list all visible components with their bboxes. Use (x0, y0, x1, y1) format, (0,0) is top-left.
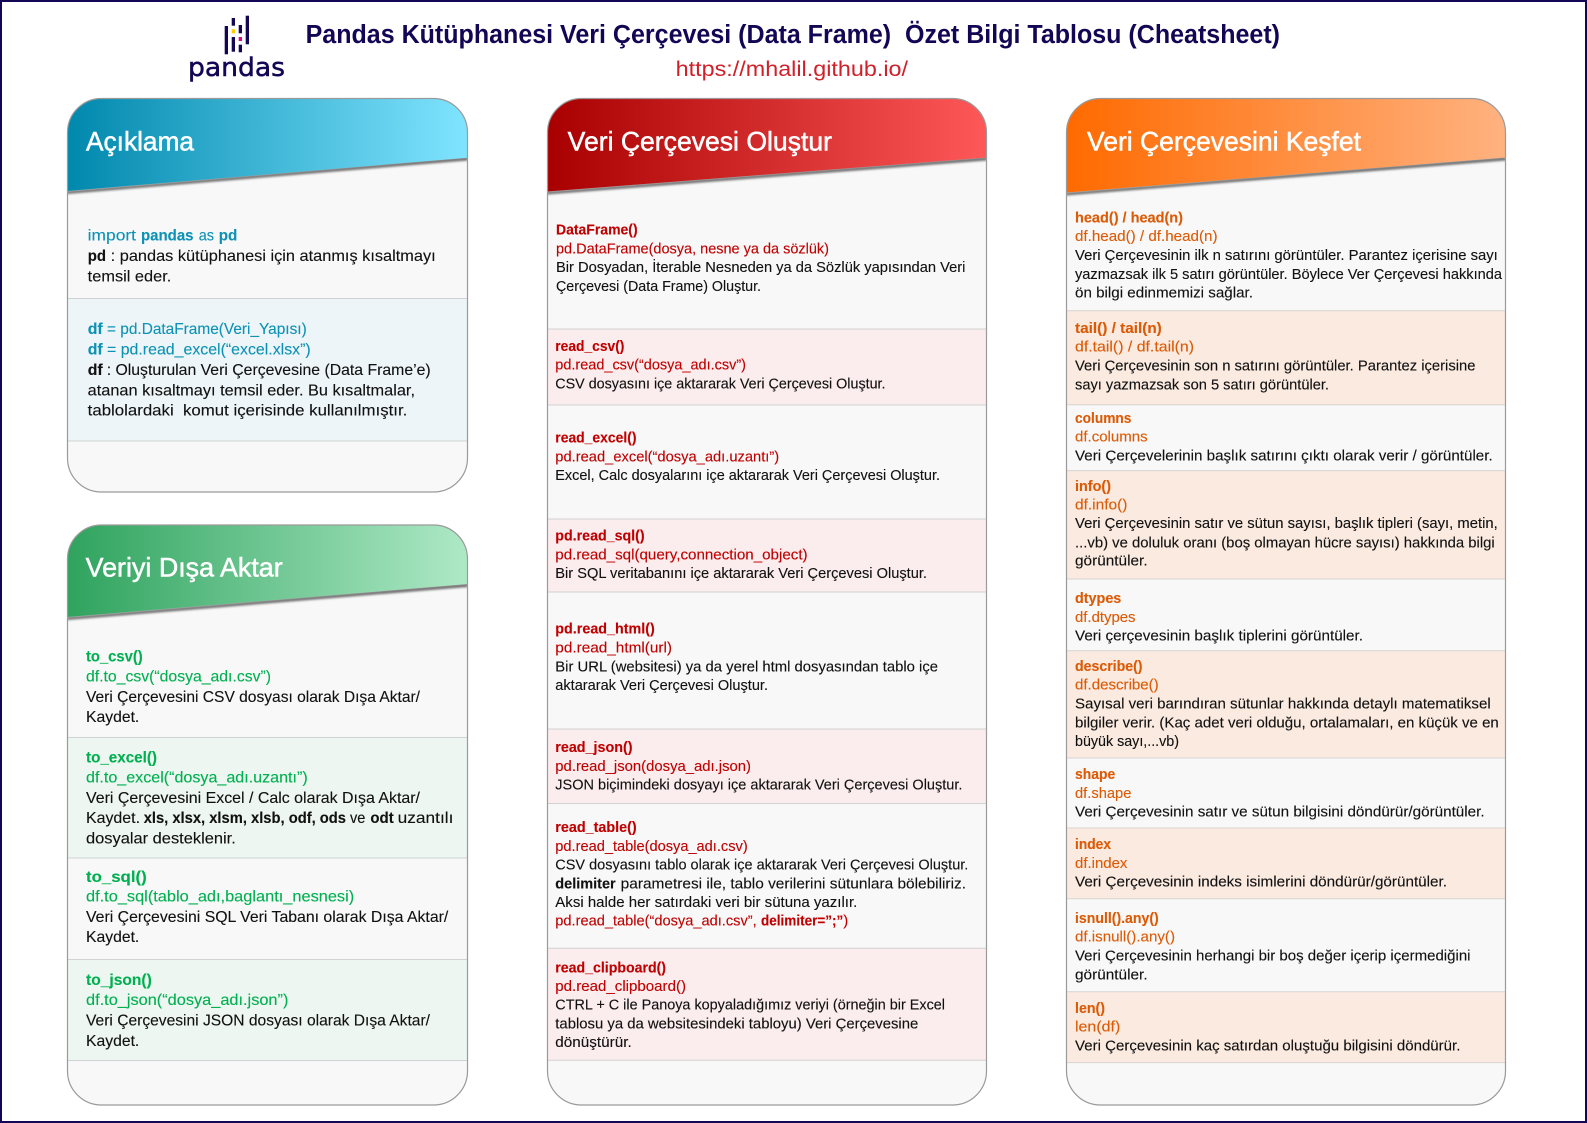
item: info: df.info() (1075, 498, 1127, 514)
item: columns: Veri Çerçevelerinin başlık satırını çıktı olarak verir / görüntüler. (1075, 448, 1493, 464)
item: to_excel: dosyalar desteklenir. (86, 830, 236, 848)
item: to_sql (86, 869, 449, 946)
item: dtypes (1075, 591, 1363, 644)
text block: df: df (88, 341, 103, 358)
item: read_json: JSON biçimindeki dosyayı içe aktararak Veri Çerçevesi Oluştur. (555, 777, 962, 793)
text block: df: df (88, 321, 103, 338)
item: read_clipboard: pd.read_clipboard() (555, 979, 686, 995)
item: columns: df.columns (1075, 430, 1148, 446)
item: head: df.head() / df.head(n) (1075, 229, 1218, 245)
item: to_excel: df.to_excel(“dosya_adı.uzantı”) (86, 770, 308, 787)
item: read_html: aktararak Veri Çerçevesi Oluştur. (555, 678, 768, 694)
item: to_excel: odt (370, 810, 394, 827)
item: read_table: pd.read_table(dosya_adı.csv) (555, 839, 748, 855)
item: to_excel: to_excel() (86, 750, 157, 766)
item: shape: df.shape (1075, 786, 1131, 802)
text block: df: df (88, 362, 103, 379)
item: read_clipboard: tablosu ya da websitesindeki tabloyu) Veri Çerçevesine (555, 1016, 918, 1032)
item: to_excel (86, 750, 453, 848)
text block: import pandas: pandas (141, 228, 194, 244)
item: to_excel: Kaydet. (86, 810, 140, 827)
item: DataFrame: pd.DataFrame(dosya, nesne ya da sözlük) (556, 241, 829, 257)
text block: import pandas: pd (88, 248, 106, 265)
item: len: len() (1075, 1001, 1105, 1017)
item: tail: Veri Çerçevesinin son n satırını görüntüler. Parantez içerisine (1075, 358, 1476, 374)
panel: Veri Çerçevesini Keşfet (1066, 90, 1506, 1105)
item: head: yazmazsak ilk 5 satırı görüntüler. Böylece Ver Çerçevesi hakkında (1075, 267, 1503, 283)
item: index: df.index (1075, 856, 1128, 872)
item: DataFrame: Çerçevesi (Data Frame) Oluştur. (556, 279, 761, 295)
text block: df: tablolardaki komut içerisinde kullanılmıştır. (88, 402, 407, 420)
item: read_csv (555, 339, 886, 392)
item: len: Veri Çerçevesinin kaç satırdan oluştuğu bilgisini döndürür. (1075, 1038, 1460, 1054)
panel: Açıklama (67, 90, 468, 492)
item: len (1075, 1001, 1460, 1054)
text block: import pandas: : pandas kütüphanesi için atanmış kısaltmayı (111, 248, 436, 265)
item: to_csv (86, 648, 421, 726)
item: to_excel: uzantılı (398, 810, 453, 827)
item: describe: büyük sayı,...vb) (1075, 734, 1179, 750)
item: to_json: Kaydet. (86, 1033, 139, 1050)
item: read_csv: pd.read_csv(“dosya_adı.csv”) (555, 358, 746, 374)
item: read_html: Bir URL (websitesi) ya da yerel html dosyasından tablo içe (555, 659, 938, 675)
text block: import pandas: pd (219, 228, 237, 244)
item: to_sql: Veri Çerçevesini SQL Veri Tabanı olarak Dışa Aktar/ (86, 909, 449, 926)
item: info: info() (1075, 479, 1111, 495)
item: to_sql: df.to_sql(tablo_adı,baglantı_nesnesi) (86, 888, 354, 906)
item: head (1075, 211, 1503, 302)
text block: df: = pd.read_excel(“excel.xlsx”) (107, 341, 311, 358)
item: read_html: pd.read_html(url) (555, 641, 672, 657)
item: describe: Sayısal veri barındıran sütunlar hakkında detaylı matematiksel (1075, 696, 1491, 712)
item: isnull: Veri Çerçevesinin herhangi bir boş değer içerip içermediğini (1075, 948, 1470, 964)
text block: df (88, 321, 431, 420)
item: describe: bilgiler verir. (Kaç adet veri olduğu, ortalamaları, en küçük ve en (1075, 716, 1499, 732)
item: read_html: pd.read_html() (555, 622, 655, 638)
item: read_table: read_table() (555, 820, 637, 836)
item: read_sql: pd.read_sql(query,connection_object) (555, 548, 808, 564)
item: read_csv: CSV dosyasını içe aktararak Veri Çerçevesi Oluştur. (555, 376, 886, 392)
item: read_csv: read_csv() (555, 339, 624, 355)
item: len: len(df) (1075, 1020, 1120, 1036)
item: to_sql: Kaydet. (86, 929, 139, 946)
item: read_sql: Bir SQL veritabanını içe aktararak Veri Çerçevesi Oluştur. (555, 566, 927, 582)
item: tail: sayı yazmazsak son 5 satırı görüntüler. (1075, 378, 1329, 394)
item: columns (1075, 411, 1493, 464)
item: dtypes: df.dtypes (1075, 610, 1136, 626)
heading: Veri Çerçevesini Keşfet: Veri Çerçevesini Keşfet (1087, 127, 1362, 157)
title: Pandas Kütüphanesi Veri Çerçevesi (Data Frame) Özet Bilgi Tablosu (Cheatsheet) (306, 20, 1280, 49)
item: info: görüntüler. (1075, 554, 1148, 570)
item: read_table: ) (843, 914, 848, 930)
text block: import pandas: temsil eder. (88, 268, 171, 285)
item: DataFrame (556, 223, 965, 295)
item: read_table: delimiter=”;” (761, 914, 843, 930)
item: read_table: delimiter (555, 876, 616, 892)
item: read_sql (555, 528, 927, 582)
item: isnull: görüntüler. (1075, 968, 1148, 984)
item: read_table: parametresi ile, tablo verilerini sütunlara bölebiliriz. (621, 876, 966, 892)
icon: pandas logo (188, 16, 285, 83)
item: to_excel: xls, xlsx, xlsm, xlsb, odf, ods (144, 810, 346, 827)
item: dtypes: Veri çerçevesinin başlık tiplerini görüntüler. (1075, 628, 1363, 644)
item: read_table: pd.read_table(“dosya_adı.csv”, (555, 914, 757, 930)
heading: Açıklama: Açıklama (86, 127, 194, 157)
item: head: ön bilgi edinmemizi sağlar. (1075, 286, 1253, 302)
item: info (1075, 479, 1498, 570)
item: index: index (1075, 837, 1112, 853)
item: read_clipboard: read_clipboard() (555, 960, 666, 976)
item: read_json (555, 740, 962, 793)
item: read_excel: Excel, Calc dosyalarını içe aktararak Veri Çerçevesi Oluştur. (555, 468, 940, 484)
item: head: Veri Çerçevesinin ilk n satırını görüntüler. Parantez içerisine sayı (1075, 248, 1498, 264)
item: read_clipboard (555, 960, 945, 1051)
item: read_excel: pd.read_excel(“dosya_adı.uzantı”) (555, 449, 779, 465)
item: to_excel: Veri Çerçevesini Excel / Calc olarak Dışa Aktar/ (86, 790, 421, 807)
item: head: head() / head(n) (1075, 211, 1183, 227)
item: index: Veri Çerçevesinin indeks isimlerini döndürür/görüntüler. (1075, 874, 1447, 890)
item: read_clipboard: dönüştürür. (555, 1035, 632, 1051)
item: DataFrame: Bir Dosyadan, İterable Nesneden ya da Sözlük yapısından Veri (556, 258, 965, 276)
text block: df: atanan kısaltmayı temsil eder. Bu kısaltmalar, (88, 382, 415, 400)
item: to_csv: df.to_csv(“dosya_adı.csv”) (86, 669, 271, 686)
item: DataFrame: DataFrame() (556, 223, 638, 239)
item: info: ...vb) ve doluluk oranı (boş olmayan hücre sayısı) hakkında bilgi (1075, 535, 1495, 551)
item: index (1075, 837, 1447, 890)
item: to_csv: Kaydet. (86, 709, 139, 726)
item: to_json: df.to_json(“dosya_adı.json”) (86, 992, 288, 1009)
panel: Veri Çerçevesi Oluştur (547, 90, 987, 1105)
item: to_sql: to_sql() (86, 869, 147, 886)
text block: df: : Oluşturulan Veri Çerçevesine (Data Frame’e) (107, 362, 431, 379)
panel: Veriyi Dışa Aktar (67, 515, 468, 1105)
item: read_table: CSV dosyasını tablo olarak içe aktararak Veri Çerçevesi Oluştur. (555, 858, 968, 874)
item: to_excel: ve (350, 810, 366, 827)
item: read_clipboard: CTRL + C ile Panoya kopyaladığımız veriyi (örneğin bir Excel (555, 998, 945, 1014)
item: to_json: to_json() (86, 972, 152, 989)
item: read_table: Aksi halde her satırdaki veri bir sütuna yazılır. (555, 895, 857, 911)
heading: Veriyi Dışa Aktar: Veriyi Dışa Aktar (86, 553, 283, 583)
item: read_sql: pd.read_sql() (555, 528, 645, 544)
item: read_json: pd.read_json(dosya_adı.json) (555, 759, 751, 775)
item: to_json: Veri Çerçevesini JSON dosyası olarak Dışa Aktar/ (86, 1012, 431, 1030)
item: isnull (1075, 911, 1470, 984)
text block: df: = pd.DataFrame(Veri_Yapısı) (107, 321, 307, 338)
text block: import pandas: import (88, 228, 137, 244)
item: shape (1075, 767, 1485, 821)
item: isnull: isnull().any() (1075, 911, 1159, 927)
item: read_table (555, 820, 968, 930)
item: read_json: read_json() (555, 740, 633, 756)
item: shape: Veri Çerçevesinin satır ve sütun bilgisini döndürür/görüntüler. (1075, 805, 1485, 821)
item: tail (1075, 321, 1476, 394)
item: dtypes: dtypes (1075, 591, 1121, 607)
item: describe: df.describe() (1075, 678, 1159, 694)
text block: import pandas: as (199, 228, 214, 244)
item: isnull: df.isnull().any() (1075, 930, 1175, 946)
item: read_excel (555, 430, 940, 484)
website url: https://mhalil.github.io/ (676, 58, 908, 81)
item: tail: df.tail() / df.tail(n) (1075, 340, 1194, 356)
item: to_csv: to_csv() (86, 648, 143, 666)
heading: Veri Çerçevesi Oluştur: Veri Çerçevesi Oluştur (568, 127, 832, 157)
item: columns: columns (1075, 411, 1131, 427)
item: tail: tail() / tail(n) (1075, 321, 1162, 337)
item: read_html (555, 622, 938, 694)
item: info: Veri Çerçevesinin satır ve sütun sayısı, başlık tipleri (sayı, metin, (1075, 516, 1498, 532)
text block: import pandas (88, 228, 436, 285)
item: describe: describe() (1075, 659, 1143, 675)
item: to_csv: Veri Çerçevesini CSV dosyası olarak Dışa Aktar/ (86, 689, 421, 706)
icon: pandas logo: pandas (188, 53, 285, 83)
item: describe (1075, 659, 1499, 750)
item: to_json (86, 972, 431, 1050)
item: shape: shape (1075, 767, 1115, 783)
item: read_excel: read_excel() (555, 430, 637, 446)
